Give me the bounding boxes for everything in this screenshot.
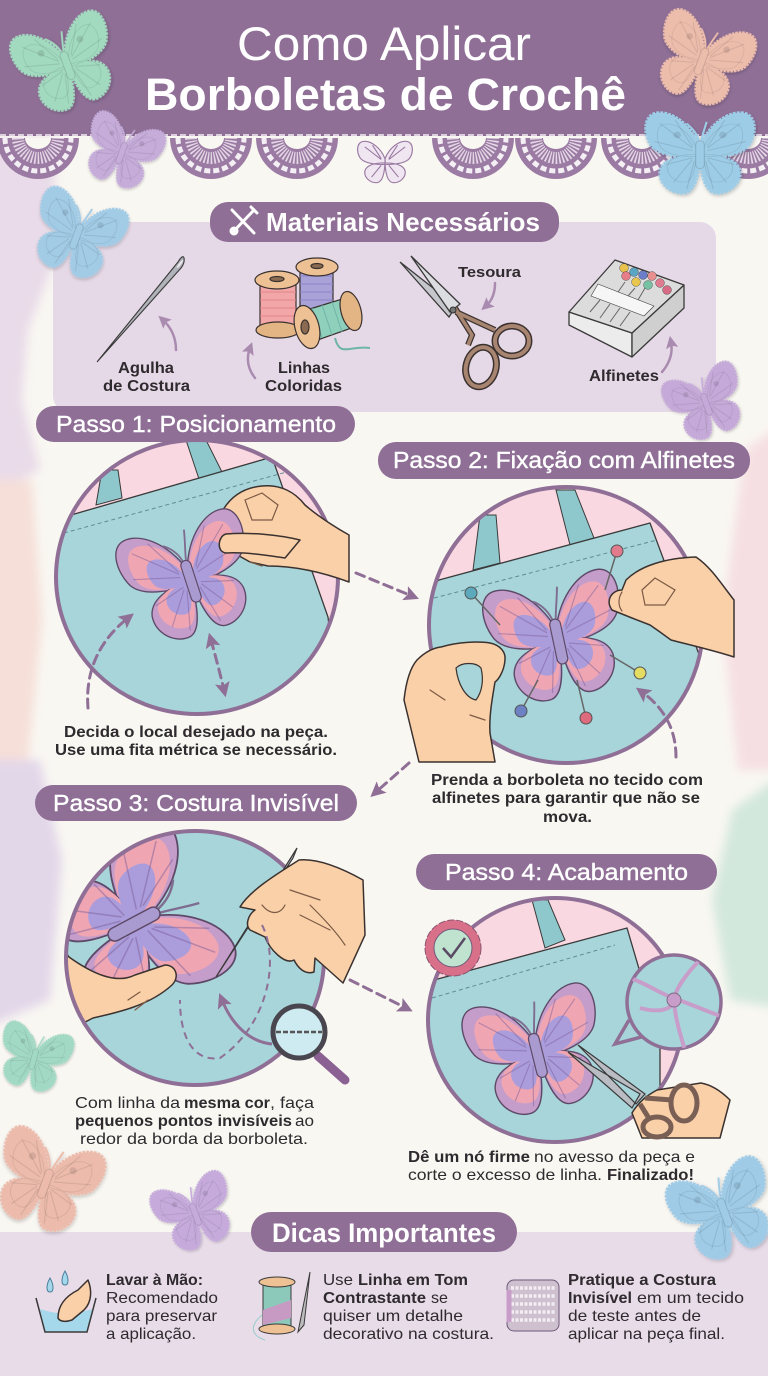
- arrow: to detail: [222, 1000, 272, 1044]
- butterfly: green: [6, 7, 128, 121]
- text: tip 1: Lavar à Mão:: [106, 1272, 203, 1289]
- arrow: pin hint: [642, 692, 676, 757]
- text: tip 3: de teste antes de: [568, 1308, 701, 1325]
- illustration: butterfly: [479, 566, 637, 710]
- illustration: step 1 circle: [50, 435, 345, 720]
- text: step 4: Dê um nó firme: [408, 1149, 530, 1166]
- label: linhas: [265, 360, 342, 395]
- icon: badge: [425, 920, 481, 976]
- butterfly: lilac right: [659, 359, 753, 447]
- panel: step 4: [408, 854, 730, 1184]
- text: step 4: Finalizado!: [607, 1167, 694, 1184]
- text: tip 2: quiser um detalhe: [323, 1308, 463, 1325]
- text: tip 3: Pratique a Costura: [568, 1272, 716, 1289]
- label: linhas: Linhas: [278, 360, 330, 377]
- icon: pin box: [569, 260, 684, 357]
- text: step 3: Com linha da: [75, 1095, 180, 1112]
- lace trim: [0, 138, 768, 179]
- icon: tools: [231, 207, 257, 234]
- text: step 3: ao: [295, 1113, 314, 1130]
- panel: step 3: [33, 785, 365, 1148]
- heading pill: passo 2: [378, 442, 750, 479]
- text: step 1: Use uma fita métrica se necessário.: [55, 742, 337, 759]
- heading pill: passo 3: Passo 3: Costura Invisível: [53, 790, 339, 816]
- text: step 2: alfinetes para garantir que não se: [432, 790, 700, 807]
- butterfly: lilac bottom: [147, 1168, 243, 1258]
- text: tip 3: [568, 1272, 744, 1343]
- icon: pins: [465, 545, 646, 724]
- label: tesoura: Tesoura: [458, 264, 522, 281]
- illustration: butterfly: [458, 979, 616, 1125]
- icon: spool with needle: [253, 1272, 310, 1340]
- text: step 2: Prenda a borboleta no tecido com: [431, 772, 703, 789]
- text: tip 2: [323, 1272, 494, 1343]
- arrow: double: [211, 640, 224, 690]
- text: tip 3: Invisível: [568, 1290, 632, 1307]
- arrow: needle: [163, 320, 176, 350]
- icon: thread spools: [255, 258, 370, 351]
- heading pill: passo 4: [416, 854, 717, 890]
- text: tip 2: Contrastante: [323, 1290, 426, 1307]
- icon: needle: [97, 257, 184, 362]
- text: tip 2: Use: [323, 1272, 353, 1289]
- text: step 2: mova.: [543, 809, 592, 826]
- title: [145, 17, 626, 120]
- text: tip 1: para preservar: [106, 1308, 218, 1325]
- icon: hand: [218, 486, 349, 582]
- text: tip 2: decorativo na costura.: [323, 1326, 494, 1343]
- butterfly: blue top right: [646, 113, 754, 193]
- text: tip 1: Recomendado: [106, 1290, 218, 1307]
- icon: hand washing: [36, 1271, 96, 1332]
- butterfly: lilac top: [76, 109, 168, 195]
- text: step 1: Decida o local desejado na peça.: [64, 724, 328, 741]
- illustration: step 2 circle: [425, 485, 710, 770]
- text: step 3: [75, 1095, 314, 1148]
- title: Borboletas de Crochê: [145, 69, 626, 120]
- title: Como Aplicar: [237, 17, 531, 70]
- text: step 3: mesma cor: [184, 1095, 270, 1112]
- text: step 1: [55, 724, 337, 759]
- text: step 2: [431, 772, 703, 826]
- label: agulha: Agulha: [118, 360, 174, 377]
- label: agulha: de Costura: [103, 378, 190, 395]
- label: linhas: Coloridas: [265, 378, 342, 395]
- text: tip 1: [106, 1272, 218, 1343]
- arrow: pins: [662, 342, 672, 372]
- icon: needle and hand: [216, 848, 365, 983]
- text: tip 3: em um tecido: [637, 1290, 744, 1307]
- label: agulha: [103, 360, 190, 395]
- heading pill: passo 2: Passo 2: Fixação com Alfinetes: [393, 447, 735, 473]
- panel: materials: [53, 202, 716, 412]
- icon: outline butterfly: [358, 141, 412, 183]
- icon: crochet swatch: [507, 1280, 559, 1331]
- butterfly: blue left: [22, 184, 132, 286]
- header banner: [0, 0, 768, 136]
- text: tip 1: a aplicação.: [106, 1326, 196, 1343]
- label: alfinetes: Alfinetes: [589, 368, 659, 385]
- heading pill: materiais: [210, 202, 559, 242]
- text: step 4: no avesso da peça e: [534, 1149, 695, 1166]
- text: tip 2: se: [431, 1290, 448, 1307]
- icon: scissors: [400, 256, 529, 390]
- heading pill: passo 4: Passo 4: Acabamento: [445, 859, 688, 885]
- text: tip 2: Linha em Tom: [358, 1272, 468, 1289]
- text: step 3: , faça: [270, 1095, 314, 1112]
- panel: step 1: [36, 406, 355, 759]
- icon: magnifier: [273, 1006, 345, 1080]
- heading pill: passo 1: Passo 1: Posicionamento: [56, 411, 336, 437]
- illustration: butterfly: [111, 505, 269, 651]
- arrow: step 1 to 2: [356, 573, 412, 596]
- heading pill: passo 3: [35, 785, 357, 821]
- icon: scissors and hand: [568, 1045, 730, 1138]
- butterfly: blue bottom right: [662, 1153, 768, 1269]
- arrow: step 2 to 3: [376, 763, 409, 792]
- icon: right hand: [609, 557, 734, 657]
- icon: left hand: [404, 642, 505, 762]
- arrow: stitch path: [180, 925, 270, 1058]
- heading pill: passo 1: [36, 406, 355, 442]
- panel: tips: [0, 1212, 768, 1376]
- butterfly: salmon bottom left: [0, 1123, 109, 1241]
- watercolor edges: [0, 140, 768, 1030]
- text: step 3: pequenos pontos invisíveis: [75, 1113, 292, 1130]
- arrow: placement: [88, 618, 128, 708]
- text: tip 3: aplicar na peça final.: [568, 1326, 725, 1343]
- icon: thumb: [219, 533, 300, 558]
- butterfly: salmon top right: [644, 6, 760, 114]
- text: step 4: [408, 1149, 695, 1184]
- illustration: step 3 circle: [64, 829, 326, 1087]
- arrow: step 3 to 4: [350, 980, 406, 1008]
- text: step 3: redor da borda da borboleta.: [80, 1131, 308, 1148]
- callout: knot: [615, 955, 721, 1060]
- heading pill: materiais: Materiais Necessários: [266, 207, 540, 237]
- arrow: spools: [248, 348, 255, 378]
- heading pill: dicas: [251, 1212, 517, 1252]
- text: step 4: corte o excesso de linha.: [408, 1167, 602, 1184]
- heading pill: dicas: Dicas Importantes: [272, 1218, 496, 1248]
- illustration: step 4 circle: [425, 895, 690, 1145]
- arrow: scissors: [486, 283, 495, 306]
- panel: step 2: [378, 442, 750, 826]
- butterfly: mint left: [0, 1019, 76, 1097]
